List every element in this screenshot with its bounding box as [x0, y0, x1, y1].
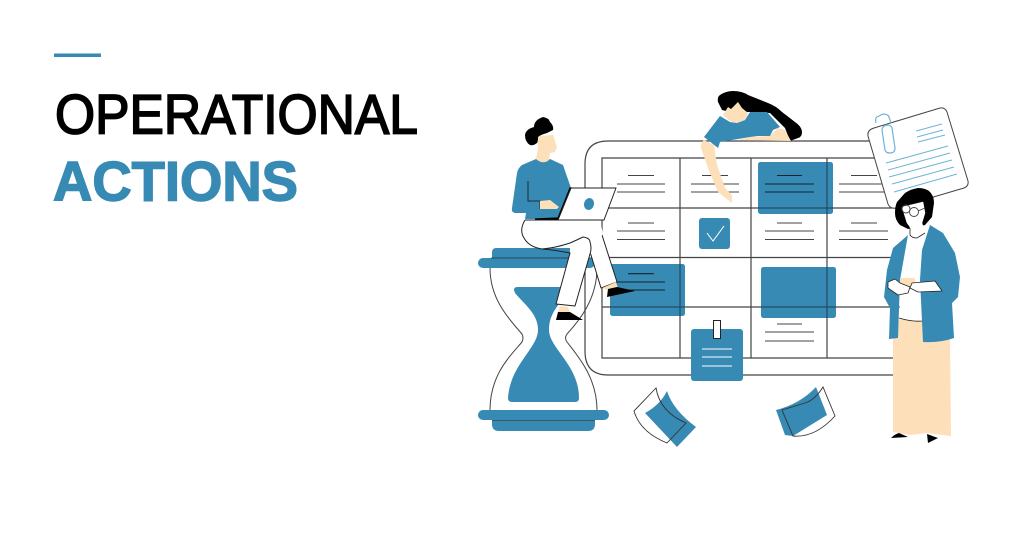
shirt — [899, 228, 930, 321]
fallen sheet left — [634, 388, 696, 447]
neck and face — [902, 202, 925, 238]
accent bar — [54, 54, 101, 57]
grid lines over cards — [610, 162, 836, 318]
glasses — [902, 205, 925, 216]
hand — [540, 200, 559, 209]
torso — [512, 159, 571, 219]
ankle and shoe back — [602, 282, 618, 290]
text lines on paper — [886, 124, 957, 192]
long hair — [718, 91, 802, 141]
checkbox card — [699, 218, 730, 249]
hands and phone — [900, 278, 915, 287]
pinned note — [691, 320, 743, 381]
back leg — [570, 218, 617, 288]
calendar board — [585, 141, 900, 375]
fallen sheet right — [776, 387, 835, 436]
arm outline — [528, 181, 540, 209]
hair — [895, 188, 934, 229]
shoes — [891, 433, 908, 438]
pointing arm — [701, 140, 732, 203]
person leaning over board — [701, 91, 802, 203]
hair — [525, 117, 553, 145]
laptop — [535, 188, 571, 219]
title: OPERATIONAL — [55, 82, 418, 146]
clipped paper document — [868, 108, 968, 208]
standing woman — [884, 188, 960, 443]
face — [723, 102, 748, 123]
cardigan right — [920, 225, 960, 342]
blue shirt — [704, 112, 780, 148]
title: ACTIONS — [53, 150, 298, 212]
hourglass — [478, 248, 609, 431]
task text lines — [617, 176, 888, 341]
cardigan left — [884, 235, 908, 339]
paper clip — [876, 114, 895, 153]
neck and face — [536, 135, 557, 162]
arm on board — [738, 128, 791, 141]
person sitting with laptop — [512, 117, 635, 320]
front leg — [522, 220, 603, 306]
shoe front — [558, 306, 570, 313]
skirt — [893, 318, 951, 436]
title — [53, 82, 418, 212]
blue task cards — [610, 162, 836, 318]
